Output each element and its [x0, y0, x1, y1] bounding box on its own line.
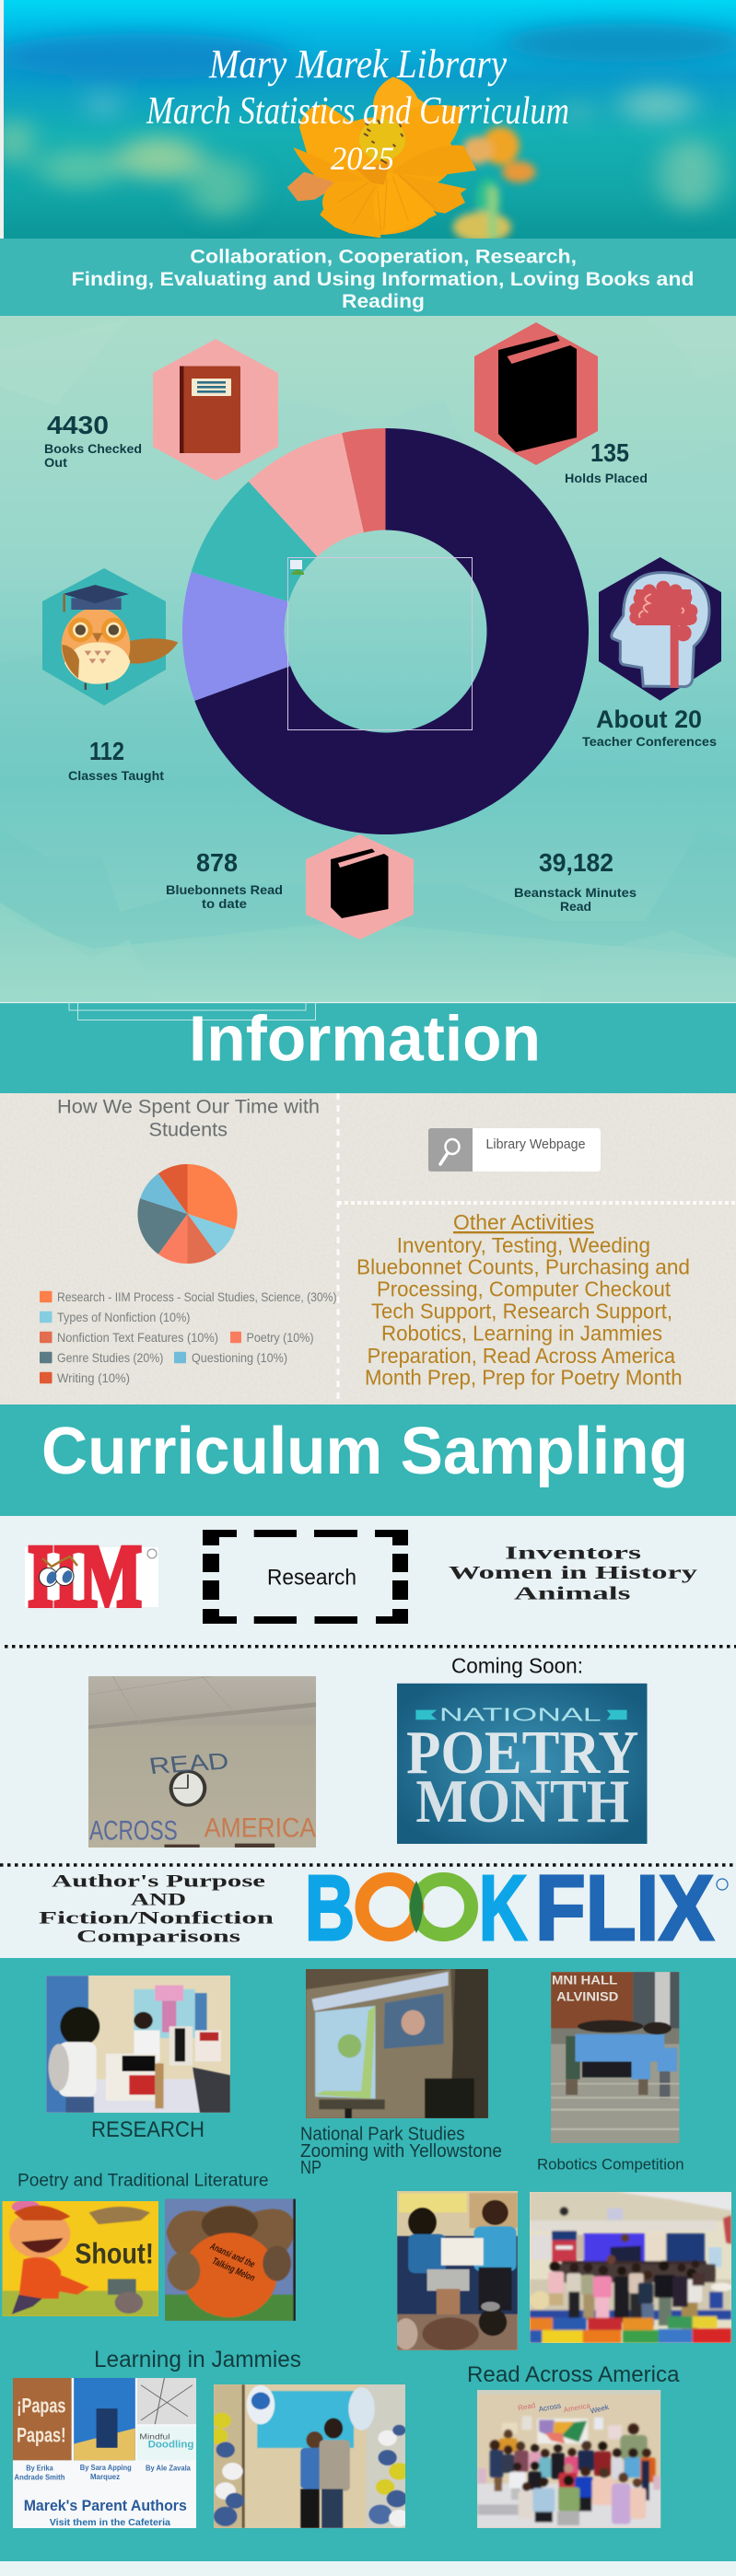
stat: 135 holds placed: 135: [590, 438, 629, 467]
caption: Learning in Jammies: Learning in Jammies: [94, 2347, 301, 2372]
book cover: Anansi and the Talking Melon: Anansi and the: [207, 2242, 257, 2270]
caption: National Park Studies: Zooming with Yellowstone: [300, 2141, 502, 2162]
poster: Marek's parent authors: Papas!: [17, 2424, 66, 2447]
search box: library webpage: Library Webpage: [486, 1136, 586, 1152]
pie legend: Genre Studies (20%): [57, 1350, 163, 1365]
stat: 39,182 beanstack minutes: 39,182: [539, 848, 613, 877]
text block: other activities: Tech Support, Research Support,: [371, 1300, 672, 1323]
image: National Poetry Month: NATIONAL: [439, 1704, 602, 1725]
pie legend: Nonfiction Text Features (10%): [57, 1330, 218, 1345]
photo: robotics competition: MNI HALL: [552, 1974, 617, 1987]
hero photo: flower on teal background: [0, 0, 736, 242]
photo: Read Across America wall clock: [88, 1676, 316, 1847]
poster: Marek's parent authors: Visit them in the Cafeteria: [50, 2518, 171, 2528]
stat: 39,182 beanstack minutes: [514, 848, 637, 914]
background low-poly shapes: [0, 318, 736, 1002]
stat: 4430 books checked out: 4430: [47, 411, 109, 439]
stat: 39,182 beanstack minutes: Read: [560, 899, 591, 914]
photo: Read Across America wall clock: READ: [147, 1748, 230, 1779]
text block: author's purpose: AND: [131, 1890, 186, 1909]
stat: 39,182 beanstack minutes: Beanstack Minutes: [514, 885, 637, 900]
poster: Marek's parent authors: ¡Papas: [17, 2395, 66, 2418]
panel: information paper: [0, 1093, 736, 1405]
text block: inventors, women in history, animals: Women in History: [449, 1563, 697, 1583]
photo: read across america class: Week: [590, 2403, 610, 2416]
logo: BookFlix: K: [479, 1857, 527, 1960]
stat: 135 holds placed: Holds Placed: [565, 471, 648, 485]
stat: about 20 teacher conferences: Teacher Conferences: [582, 734, 717, 749]
caption: Poetry and Traditional Literature: Poetry and Traditional Literature: [18, 2171, 269, 2190]
photo: read across america class: [477, 2390, 660, 2528]
donut chart: [182, 428, 589, 834]
heading band: Information: Information: [189, 1002, 541, 1074]
text block: inventors, women in history, animals: Inventors: [505, 1544, 641, 1564]
text block: other activities: Preparation, Read Across America: [368, 1344, 676, 1368]
dashed frame: Research: [203, 1530, 408, 1624]
subtitle band: [0, 239, 736, 316]
broken image placeholder box: [287, 558, 472, 729]
photo: robotics competition: [551, 1972, 680, 2143]
caption: National Park Studies: [300, 2125, 502, 2178]
caption: Coming Soon: Coming Soon:: [451, 1654, 583, 1678]
title: Mary Marek Library: Mary Marek Library: [208, 41, 507, 87]
heading: how we spent our time: [57, 1096, 320, 1141]
poster: Marek's parent authors: Andrade Smith: [15, 2473, 64, 2481]
text block: other activities: Other Activities: [453, 1210, 594, 1234]
panel: library statistics: [0, 316, 736, 1002]
stat: 878 bluebonnets read: Bluebonnets Read: [166, 882, 283, 897]
photo: national park zoom: [306, 1969, 488, 2118]
flower: [287, 76, 536, 242]
stat: 4430 books checked out: [44, 411, 142, 470]
panel: curriculum sampling: [0, 1516, 736, 1960]
text block: other activities: Inventory, Testing, Weeding: [397, 1233, 650, 1257]
text block: author's purpose: Fiction/Nonfiction: [39, 1908, 275, 1928]
pie legend: [40, 1289, 337, 1385]
pie legend: Writing (10%): [57, 1370, 130, 1385]
title: March Statistics and Curriculum: March Statistics and Curriculum: [146, 90, 569, 133]
heading band: Information: [0, 1002, 736, 1093]
dashed frame: Research: Research: [267, 1566, 356, 1591]
stat: 112 classes taught: Classes Taught: [68, 768, 164, 783]
heading band: Curriculum Sampling: [0, 1405, 736, 1516]
subtitle band: Collaboration, Cooperation, Research,: [190, 247, 577, 268]
logo: IIM: IIM: [28, 1527, 142, 1625]
photo: research fair: [46, 1976, 230, 2113]
text block: other activities: Processing, Computer Checkout: [377, 1276, 671, 1300]
hero banner: [0, 0, 736, 242]
book cover: Shout: [2, 2201, 158, 2316]
subtitle band: Reading: [342, 291, 425, 312]
search box: library webpage: [428, 1128, 601, 1171]
photo: read across america class: America: [563, 2401, 591, 2414]
stat: 112 classes taught: 112: [89, 737, 124, 765]
text block: author's purpose: Author's Purpose: [52, 1871, 265, 1891]
heading band: Curriculum Sampling: Curriculum Sampling: [41, 1415, 688, 1488]
poster: Marek's parent authors: [13, 2378, 196, 2528]
text block: inventors, women in history, animals: Animals: [514, 1584, 631, 1604]
photo: read across america class: Read: [517, 2401, 536, 2412]
panel: photo collage: [0, 1958, 736, 2561]
text block: other activities: Robotics, Learning in Jammies: [381, 1322, 662, 1346]
text block: inventors, women in history, animals: [449, 1544, 697, 1604]
title: 2025: 2025: [331, 140, 394, 177]
caption: National Park Studies: NP: [300, 2158, 321, 2178]
book cover: Anansi and the Talking Melon: [165, 2198, 296, 2321]
stat: 878 bluebonnets read: [166, 848, 283, 911]
pie legend: Poetry (10%): [247, 1330, 313, 1345]
text block: other activities: [356, 1210, 690, 1390]
logo: BookFlix: FLIX: [535, 1857, 714, 1960]
caption: National Park Studies: National Park Studies: [300, 2125, 465, 2145]
text block: author's purpose: Comparisons: [76, 1927, 240, 1946]
photo: Read Across America wall clock: ACROSS: [89, 1815, 178, 1846]
stat: 4430 books checked out: Books Checked: [44, 441, 142, 456]
text block: other activities: Bluebonnet Counts, Purchasing and: [356, 1254, 690, 1278]
book cover: Anansi and the Talking Melon: Talking Melon: [210, 2256, 257, 2283]
icon: black book in salmon hexagon: [474, 322, 598, 465]
logo: BookFlix: B: [305, 1857, 355, 1960]
poster: Marek's parent authors: Marquez: [90, 2473, 121, 2481]
icon: owl with graduation cap in teal hexagon: [42, 568, 178, 705]
icon: black book in lower pink hexagon: [306, 834, 414, 939]
stat: 878 bluebonnets read: 878: [196, 848, 238, 877]
pie legend: Types of Nonfiction (10%): [57, 1310, 190, 1324]
photo: football players reading: [397, 2191, 518, 2350]
poster: Marek's parent authors: By Sara Apping: [80, 2464, 132, 2472]
pie chart: [137, 1164, 238, 1264]
caption: Read Across America: Read Across America: [467, 2362, 680, 2387]
subtitle band: Finding, Evaluating and Using Information, Loving Books and: [72, 269, 695, 290]
footer strip: [0, 2561, 736, 2576]
text block: other activities: Month Prep, Prep for Poetry Month: [365, 1366, 683, 1390]
caption: RESEARCH: RESEARCH: [91, 2117, 204, 2142]
photo: robotics competition: ALVINISD: [556, 1990, 618, 2004]
photo: learning in jammies: [214, 2384, 405, 2528]
pie legend: Questioning (10%): [192, 1350, 287, 1365]
photo: class with guest: [530, 2192, 732, 2343]
poster: Marek's parent authors: By Erika: [26, 2464, 54, 2472]
image: National Poetry Month: [397, 1684, 647, 1844]
photo: read across america class: Across: [538, 2402, 562, 2414]
stat: about 20 teacher conferences: About 20: [596, 705, 702, 733]
icon: red book in pink hexagon: [153, 339, 278, 481]
caption: Robotics Competition: Robotics Competition: [537, 2155, 684, 2174]
poster: Marek's parent authors: Mindful: [139, 2432, 169, 2441]
heading: how we spent our time: How We Spent Our Time with: [57, 1096, 320, 1118]
stat: about 20 teacher conferences: [582, 705, 717, 749]
stat: 112 classes taught: [68, 737, 164, 783]
stat: 878 bluebonnets read: to date: [202, 896, 247, 911]
stat: 135 holds placed: [565, 438, 648, 485]
stat: 4430 books checked out: Out: [44, 455, 67, 470]
heading: how we spent our time: Students: [149, 1120, 228, 1141]
text block: author's purpose: [39, 1871, 275, 1946]
logo: BookFlix: [305, 1857, 728, 1960]
icon: head with brain in navy hexagon: [599, 557, 721, 701]
pie legend: Research - IIM Process - Social Studies, Science, (30%): [57, 1289, 337, 1304]
